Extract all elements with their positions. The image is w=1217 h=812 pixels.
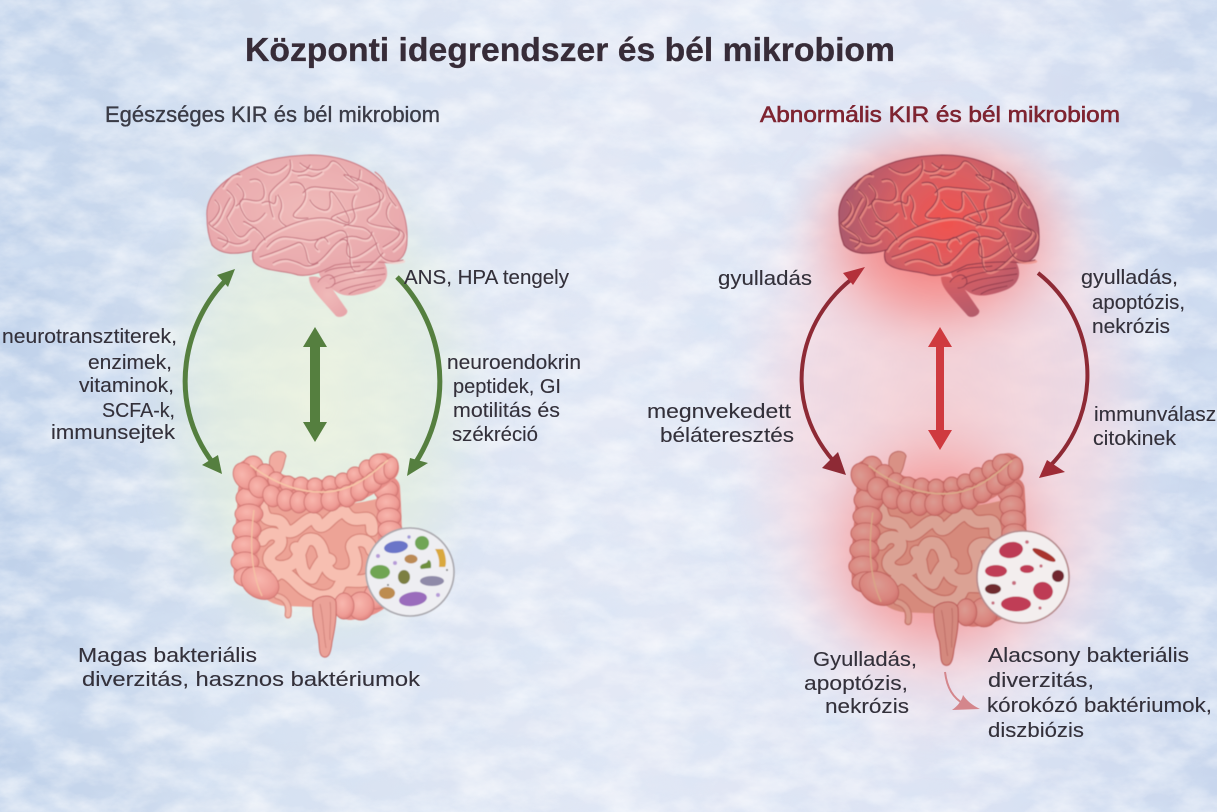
label: gut inflammation: Gyulladás, [813,648,917,671]
label: left pathway: immunsejtek [51,421,176,444]
double arrow centre abnormal [928,327,952,450]
label: left pathway: SCFA-k, [102,399,175,422]
panel: abnormal [647,155,1217,742]
arrow: gut to brain abnormal [802,267,865,475]
glow: healthy side [143,130,493,670]
label: left pathway: enzimek, [88,351,172,374]
label: gut inflammation: apoptózis, [804,672,908,695]
label: diversity: Magas bakteriális [78,644,257,667]
label: right pathway: székréció [452,423,538,446]
label: inflammation right [1081,266,1185,338]
small arrow [945,672,980,710]
label: immune response: citokinek [1093,427,1177,450]
intestine abnormal [846,451,1028,665]
label: inflammation right: gyulladás, [1081,266,1178,289]
label: left pathway: neurotransztiterek, [2,325,177,348]
label: permeability: béláteresztés [660,424,794,447]
label: low diversity: diverzitás, [988,669,1094,692]
label: left pathway: vitaminok, [79,374,174,397]
label: right pathway: motilitás és [453,399,560,422]
double arrow centre [303,327,327,442]
microbiome lens abnormal [977,531,1069,623]
label: right pathway [447,351,581,446]
brain healthy [207,155,407,317]
arrow: brain to gut abnormal [1038,273,1087,478]
label: gut inflammation [804,648,917,718]
label: ANS HPA: ANS, HPA tengely [404,266,570,289]
label: inflammation right: apoptózis, [1092,291,1185,314]
heading: abnormal: Abnormális KIR és bél mikrobiom [760,102,1120,127]
label: diversity [78,644,421,691]
brain abnormal [839,155,1039,317]
label: diversity: diverzitás, hasznos baktériumok [82,668,421,691]
heading: healthy: Egészséges KIR és bél mikrobiom [105,102,440,127]
panel: healthy [2,155,581,691]
label: low diversity: kórokózó baktériumok, [987,694,1212,717]
label: right pathway: neuroendokrin [447,351,581,374]
label: immune response [1093,403,1217,450]
label: immune response: immunválasz, [1094,403,1217,426]
label: permeability: megnvekedett [647,400,791,423]
label: right pathway: peptidek, GI [453,375,561,398]
arrow: brain to gut [397,277,440,476]
label: low diversity: diszbiózis [988,719,1084,742]
label: low diversity [987,644,1212,742]
label: inflammation right: nekrózis [1092,315,1170,338]
intestine healthy [228,451,403,657]
glow: abnormal side [730,100,1160,760]
label: low diversity: Alacsony bakteriális [988,644,1189,667]
arrow: gut to brain [185,269,235,474]
microbiome lens healthy [366,528,454,616]
label: left pathway [2,325,177,444]
label: permeability [647,400,794,447]
label: gut inflammation: nekrózis [825,695,909,718]
label: gyulladás left: gyulladás [718,267,812,290]
title: Központi idegrendszer és bél mikrobiom [245,31,895,68]
